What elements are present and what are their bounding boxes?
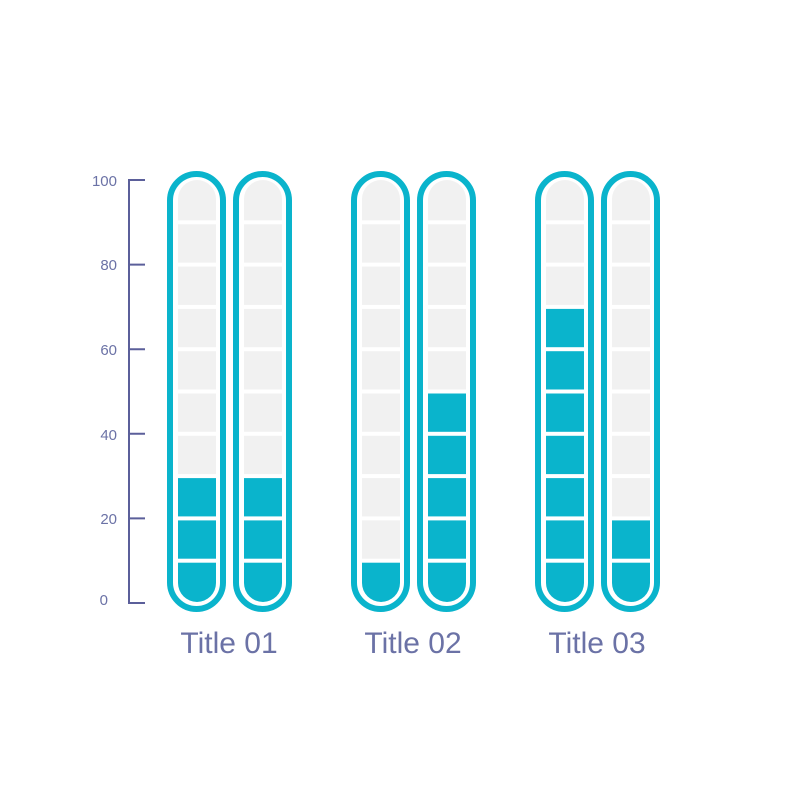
y axis: 20: [100, 511, 117, 528]
y axis: 60: [100, 342, 117, 359]
tube 2b: 50: [420, 174, 473, 609]
tube 3a: 70: [538, 174, 591, 609]
tube 3b: 20: [604, 174, 657, 609]
label: Title 03: Title 03: [548, 627, 646, 660]
tube 2a: 10: [354, 174, 407, 609]
tube 1a: 30: [170, 174, 223, 609]
y axis: 80: [100, 257, 117, 274]
label: Title 01: Title 01: [180, 627, 278, 660]
y axis: 100: [92, 173, 117, 190]
tube 1b: 30: [236, 174, 289, 609]
y axis: 0: [100, 592, 108, 609]
y axis: [92, 173, 145, 609]
label: Title 02: Title 02: [364, 627, 462, 660]
y axis: 40: [100, 427, 117, 444]
